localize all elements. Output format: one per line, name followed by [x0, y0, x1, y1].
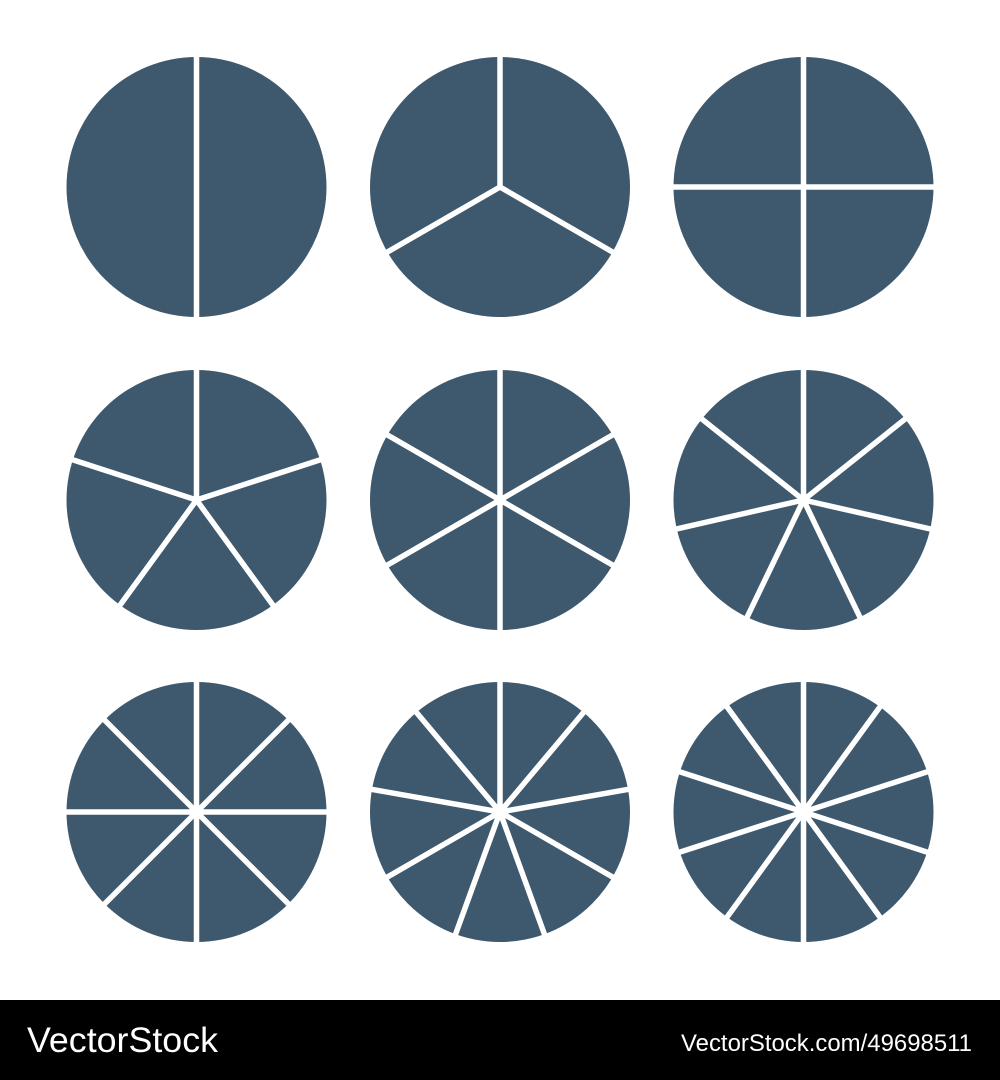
pie divided into 2 segments — [66, 53, 326, 321]
pie divided into 7 segments — [673, 366, 934, 630]
pie divided into 3 segments — [370, 53, 630, 317]
pie divided into 10 segments — [674, 678, 934, 946]
pie divided into 9 segments — [368, 678, 632, 942]
footer image id text: VectorStock.com/49698511 — [681, 1030, 972, 1057]
pie divided into 8 segments — [62, 678, 330, 946]
footer bar — [0, 1000, 1000, 1080]
pie divided into 5 segments — [66, 366, 326, 630]
pie divided into 6 segments — [370, 366, 630, 634]
footer logo text: VectorStock — [27, 1020, 218, 1060]
pie divided into 4 segments — [670, 53, 938, 321]
